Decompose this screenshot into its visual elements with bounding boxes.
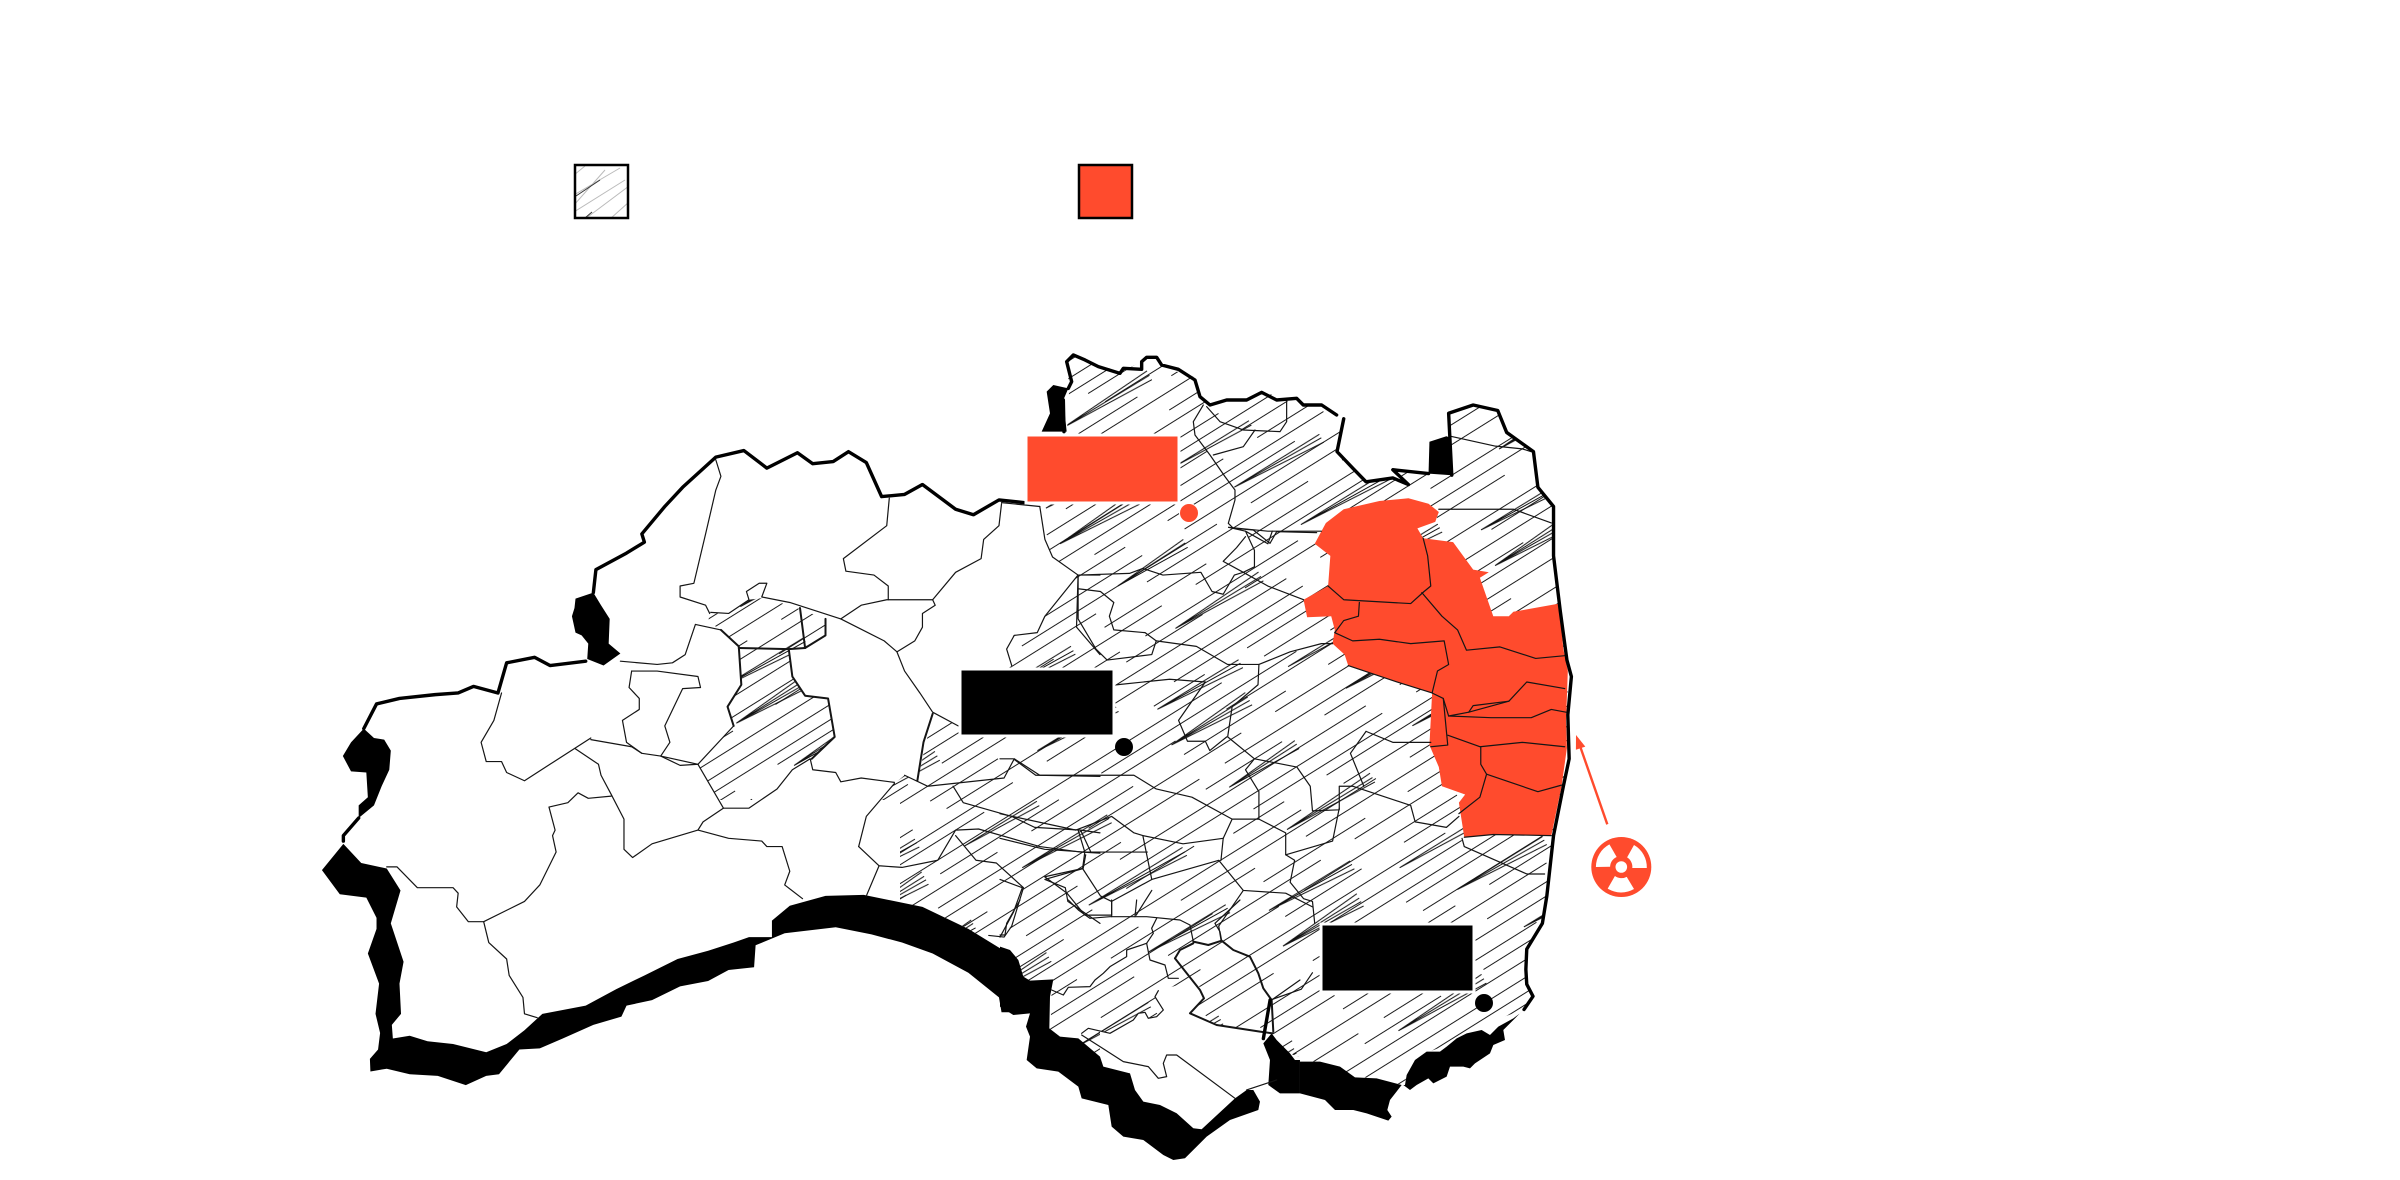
map: red zone internal boundaries (1328, 538, 1566, 837)
map: hatched central pocket (700, 598, 900, 800)
city dot: black two (1475, 994, 1493, 1012)
map: thin municipal boundaries east (1000, 436, 1551, 1000)
map: thick outer border north detail (1063, 355, 1337, 432)
map: thicker central pocket boundary (721, 608, 933, 781)
legend swatch: red (1079, 165, 1132, 218)
icon: radiation symbol (1589, 837, 1651, 900)
city label: red box (1026, 435, 1179, 503)
map: red evacuation zone (1304, 498, 1568, 837)
map: boundaries south detail (1000, 900, 1300, 1098)
city dot: red (1180, 504, 1198, 522)
legend swatch: hatched (574, 165, 629, 219)
arrow to nuclear plant (1576, 735, 1607, 824)
map: thick outer border west (343, 451, 1024, 841)
map: boundaries north detail (1193, 400, 1317, 543)
city dot: black one (1115, 738, 1133, 756)
city label: black box one (960, 669, 1114, 736)
map: thick outer border east (1263, 405, 1571, 1039)
map: hatched non-evacuated municipalities (900, 357, 1568, 1084)
map: thin municipal boundaries west (387, 460, 1100, 1018)
city label: black box two (1321, 924, 1474, 992)
map: black thick neighbouring borders (322, 385, 1523, 1160)
map: thick south valley boundary (1175, 941, 1273, 1033)
